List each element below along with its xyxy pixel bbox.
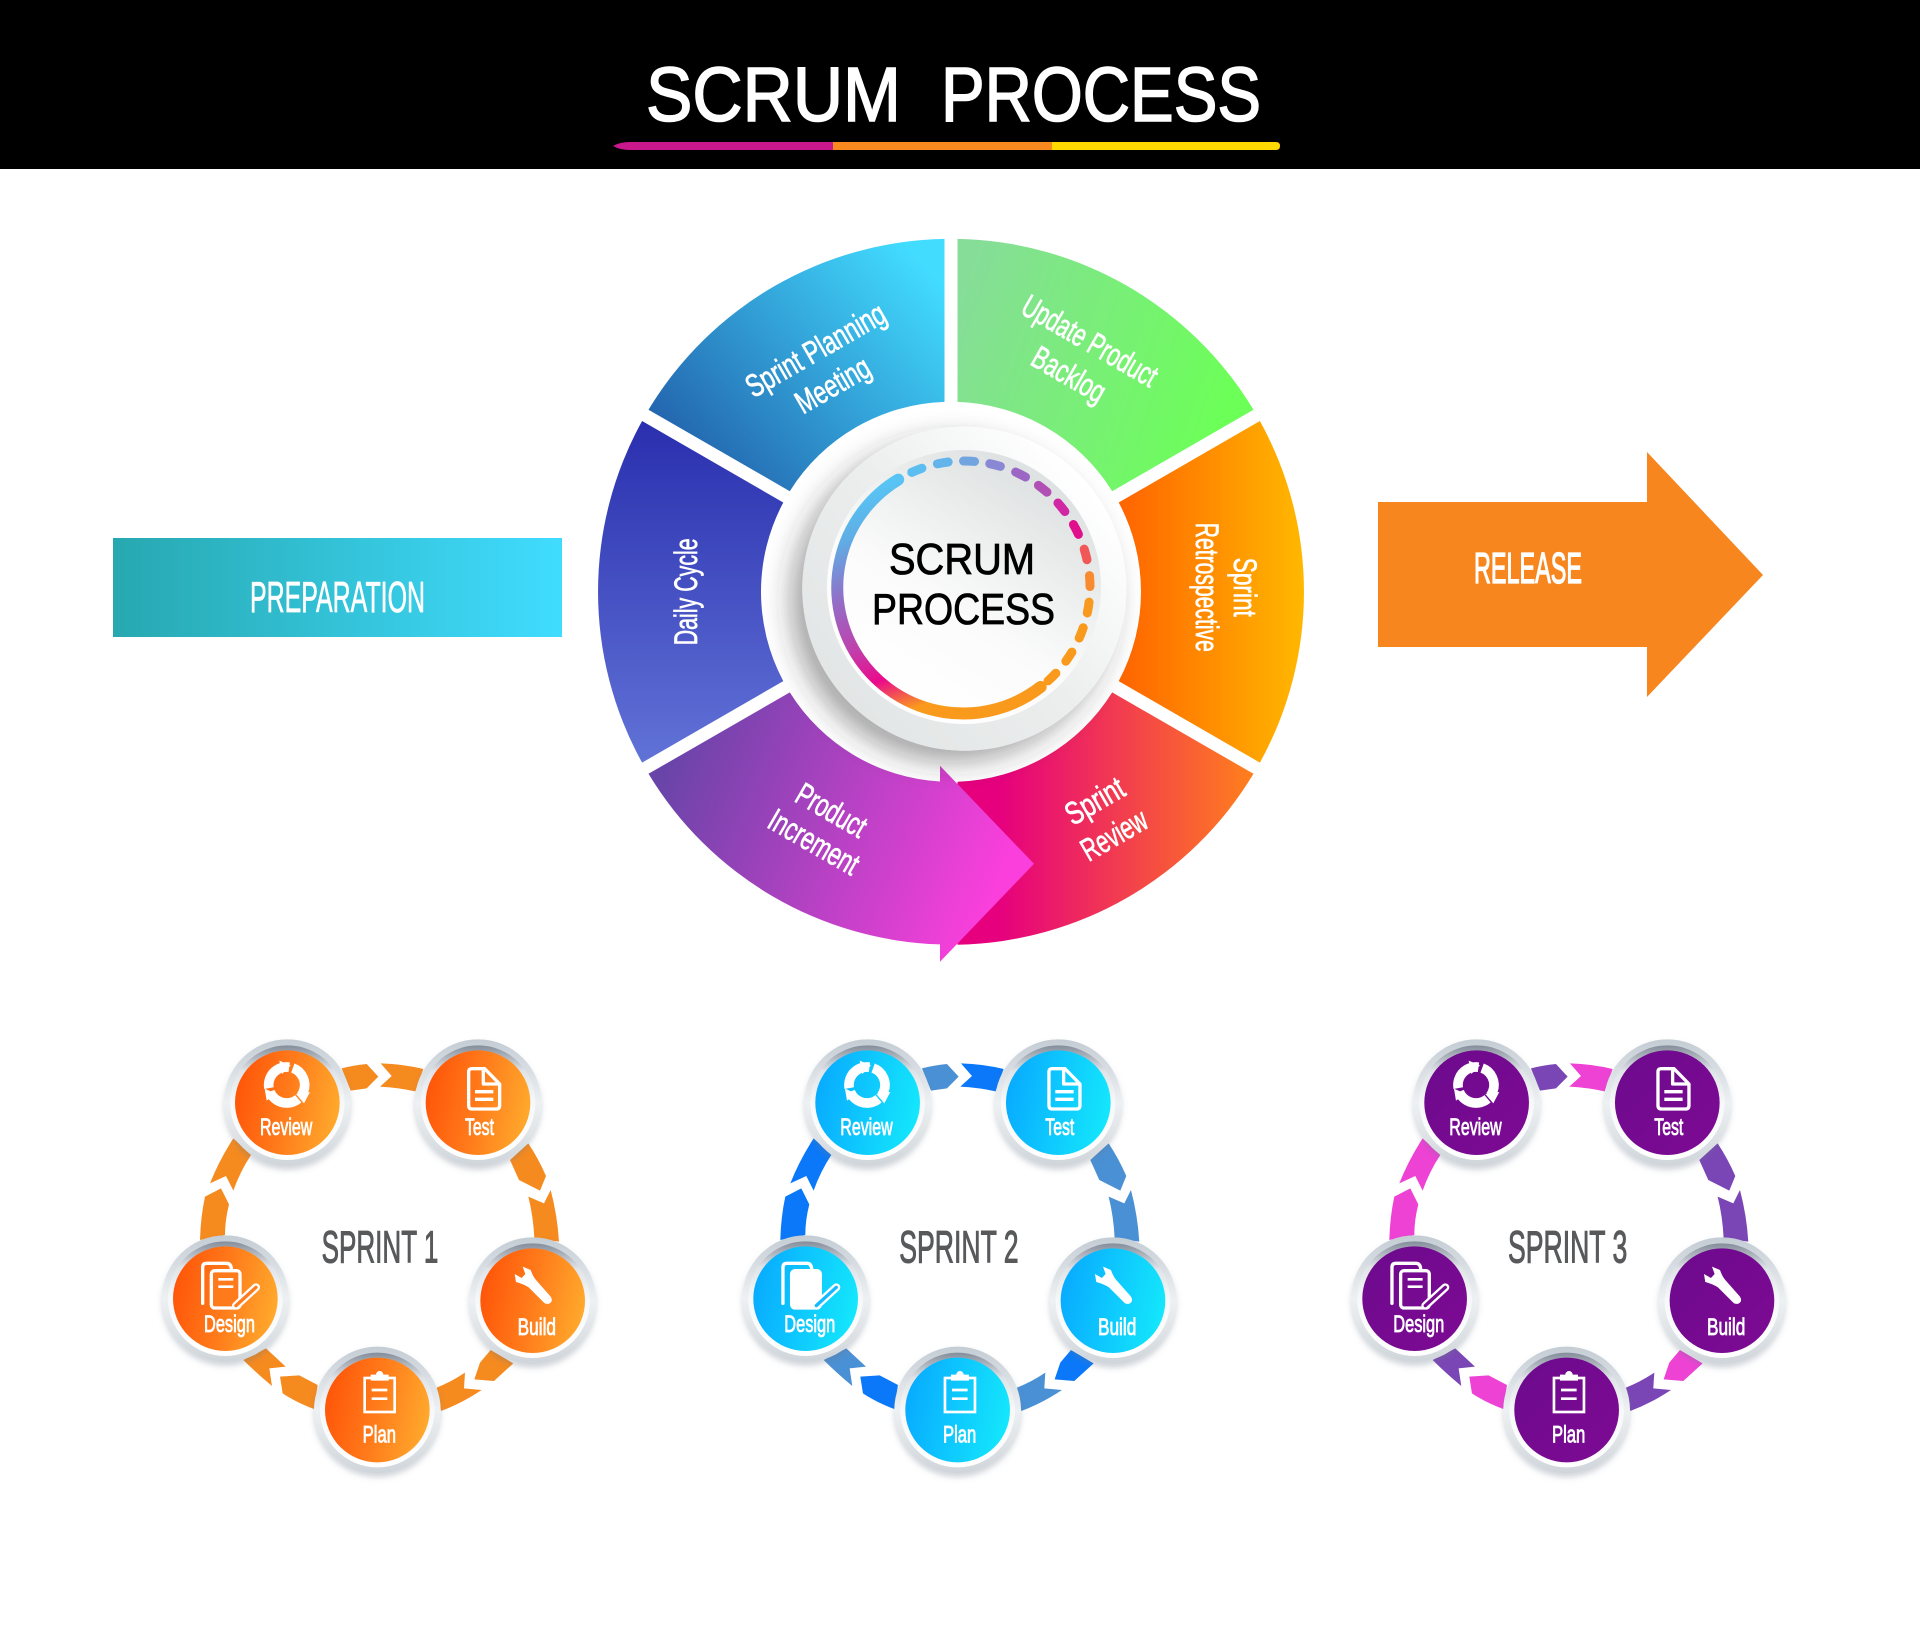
segment: Daily Cycle [598,421,783,763]
node: Test [995,1039,1122,1166]
node: Design [742,1235,869,1362]
label: Product: Product [790,776,873,845]
node: Test [415,1039,541,1166]
header band [0,0,1920,169]
progress ring: solid arc [837,480,1041,713]
hub text [872,535,1055,634]
label: Sprint (review): Sprint [1058,769,1131,832]
node: Build: Build [518,1314,556,1341]
label: Update Product: Update Product [1016,287,1164,394]
heading: Sprint 1: SPRINT 1 [322,1221,438,1272]
preparation banner [113,538,562,637]
node: Test [1604,1039,1731,1166]
node: Plan: Plan [363,1422,396,1449]
arrows: sprint 3 cycle [1389,1063,1748,1411]
node: Test: Test [1045,1114,1075,1141]
center hub [786,409,1142,765]
node: Plan: Plan [943,1422,976,1449]
hub outer disc [802,427,1126,751]
node: Review: Review [1449,1114,1502,1141]
node: Plan: Plan [1552,1422,1585,1449]
segment: Sprint Planning Meeting [648,239,944,491]
heading: Sprint 2: SPRINT 2 [899,1221,1019,1272]
label: Sprint: Sprint [1227,558,1263,617]
hub text: PROCESS [872,585,1055,634]
sprint 1 cycle [162,1039,596,1473]
node: Build [1659,1237,1785,1364]
heading: Sprint 3: SPRINT 3 [1508,1221,1627,1272]
node: Build [469,1237,596,1364]
node: Design [162,1235,289,1362]
node: Test: Test [1654,1114,1684,1141]
node: Design [1351,1235,1478,1362]
label: Daily Cycle: Daily Cycle [668,538,704,645]
node: Review [804,1039,931,1166]
node: Build [1050,1237,1176,1364]
scrum wheel [598,239,1304,962]
label: Backlog: Backlog [1025,339,1113,410]
node: Review [224,1039,351,1166]
node: Review [1413,1039,1540,1166]
progress ring: dashes [786,409,1142,765]
label: Increment: Increment [762,801,866,882]
node: Design: Design [1393,1311,1444,1338]
label: Meeting: Meeting [789,349,877,421]
node: Build: Build [1098,1314,1136,1341]
title [646,52,1261,138]
node: Design: Design [204,1311,255,1338]
segment: Sprint Retrospective [1119,421,1304,763]
title underline [613,142,1280,150]
node: Build: Build [1707,1314,1745,1341]
label: Sprint Planning: Sprint Planning [739,295,892,404]
node: Plan [314,1347,441,1473]
preparation banner: PREPARATION [250,573,425,622]
label: Review: Review [1074,801,1154,868]
node: Plan [894,1347,1021,1473]
sprint 2 cycle [742,1039,1176,1473]
title: SCRUM [646,52,901,138]
release arrow: RELEASE [1474,544,1582,593]
node: Test: Test [465,1114,494,1141]
hub text: SCRUM [889,535,1035,584]
arrows: sprint 2 cycle [780,1063,1139,1411]
node: Review: Review [840,1114,893,1141]
release arrow [1378,452,1763,697]
sprint 3 cycle [1351,1039,1785,1473]
node: Design: Design [784,1311,835,1338]
title: PROCESS [941,52,1261,138]
segment: Sprint Review [958,692,1254,945]
label: Retrospective: Retrospective [1189,523,1225,652]
node: Plan [1503,1347,1630,1473]
arrows: sprint 1 cycle [200,1063,559,1411]
hub face [827,450,1101,724]
segment: Update Product Backlog [958,239,1254,491]
node: Review: Review [260,1114,313,1141]
segment: Product Increment arrow [648,692,1034,962]
